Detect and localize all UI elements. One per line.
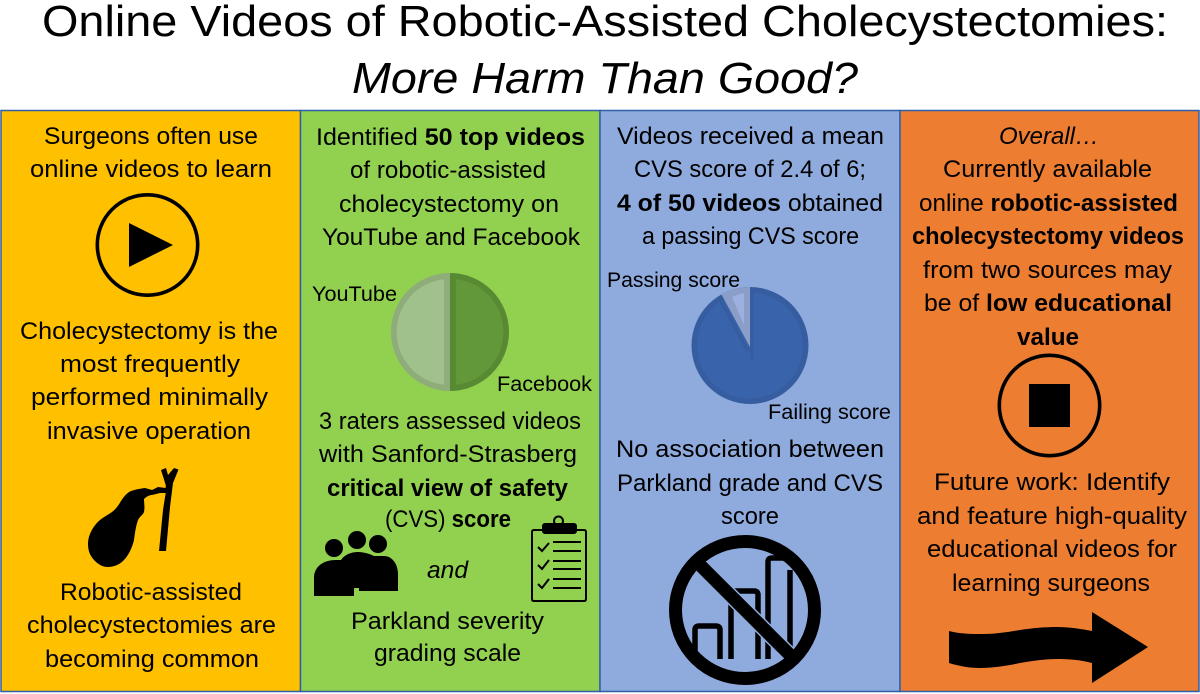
text block: overall conclusion: Overall… <box>999 123 1099 150</box>
text block: raters: (CVS) score <box>385 506 511 533</box>
text block: future work: and feature high-quality <box>917 503 1188 530</box>
icon: crossed-out bar chart <box>676 542 814 678</box>
text block: mean CVS score: 4 of 50 videos obtained <box>617 190 883 217</box>
icon: group of raters <box>314 531 398 596</box>
icon: clipboard checklist <box>532 516 586 601</box>
panel: orange background <box>900 110 1199 692</box>
chart: YouTube and Facebook pie <box>312 273 592 396</box>
text block: Parkland scale: grading scale <box>374 640 521 667</box>
text block: overall conclusion <box>912 123 1184 351</box>
text block: identified videos <box>316 124 585 251</box>
icon: gallbladder <box>88 468 178 567</box>
text block: cholecystectomy frequency: Cholecystectomy is the <box>20 318 278 345</box>
text block: robotic-assisted common: Robotic-assisted <box>60 579 242 606</box>
label: Failing score: Failing score <box>768 400 891 424</box>
text block: robotic-assisted common: cholecystectomies are <box>27 612 276 639</box>
text: and: and <box>427 557 469 584</box>
text block: surgeons learn online: online videos to learn <box>30 156 272 183</box>
icon: stop button <box>999 355 1100 456</box>
panel: results <box>607 123 891 678</box>
text block: cholecystectomy frequency: performed minimally <box>31 384 269 411</box>
text block: cholecystectomy frequency <box>20 318 278 445</box>
text block: overall conclusion: be of low educational <box>924 290 1172 317</box>
title <box>42 0 1168 103</box>
text block: future work <box>917 469 1188 597</box>
text block: overall conclusion: cholecystectomy videos <box>912 223 1184 250</box>
panel: yellow background <box>1 110 300 692</box>
text block: mean CVS score: a passing CVS score <box>642 223 859 250</box>
text block: cholecystectomy frequency: invasive operation <box>47 418 251 445</box>
text block: mean CVS score: CVS score of 2.4 of 6; <box>634 156 866 183</box>
label: Passing score: Passing score <box>607 268 740 292</box>
text block: identified videos: YouTube and Facebook <box>322 224 581 251</box>
text block: no association: score <box>721 503 779 530</box>
panel: blue background <box>600 110 900 692</box>
text block: mean CVS score <box>617 123 884 250</box>
title: More Harm Than Good? <box>352 54 859 103</box>
label: Facebook: Facebook <box>497 372 592 396</box>
text block: raters: 3 raters assessed videos <box>319 408 581 435</box>
text block: identified videos: of robotic-assisted <box>350 157 546 184</box>
text block: overall conclusion: from two sources may <box>923 257 1173 284</box>
label: YouTube: YouTube <box>312 282 397 306</box>
text block: robotic-assisted common: becoming common <box>45 646 259 673</box>
panel: conclusion <box>912 123 1188 683</box>
text block: Parkland scale <box>351 608 545 667</box>
text block: cholecystectomy frequency: most frequently <box>60 351 241 378</box>
text block: identified videos: cholecystectomy on <box>339 191 559 218</box>
text block: future work: Future work: Identify <box>934 469 1171 496</box>
text block: no association: Parkland grade and CVS <box>617 470 883 497</box>
text block: raters: with Sanford-Strasberg <box>318 441 577 468</box>
panel: methods <box>312 124 592 667</box>
text block: robotic-assisted common <box>27 579 276 673</box>
text block: overall conclusion: online robotic-assisted <box>919 190 1178 217</box>
text block: future work: educational videos for <box>927 536 1177 563</box>
text block: no association: No association between <box>616 436 884 463</box>
text block: surgeons learn online <box>30 123 272 183</box>
text block: raters <box>318 408 581 533</box>
text block: mean CVS score: Videos received a mean <box>617 123 884 150</box>
chart: passing and failing pie <box>607 268 891 424</box>
panel: green background <box>300 110 600 692</box>
text block: identified videos: Identified 50 top videos <box>316 124 585 151</box>
text block: no association <box>616 436 884 530</box>
text block: overall conclusion: Currently available <box>943 156 1152 183</box>
text block: Parkland scale: Parkland severity <box>351 608 545 635</box>
panel: background and surgeons <box>20 123 278 673</box>
text block: overall conclusion: value <box>1017 324 1079 351</box>
text block: surgeons learn online: Surgeons often use <box>44 123 258 150</box>
icon: play button <box>97 195 198 295</box>
text block: raters: critical view of safety <box>327 475 568 502</box>
text block: future work: learning surgeons <box>952 570 1150 597</box>
icon: wavy arrow <box>949 612 1148 683</box>
